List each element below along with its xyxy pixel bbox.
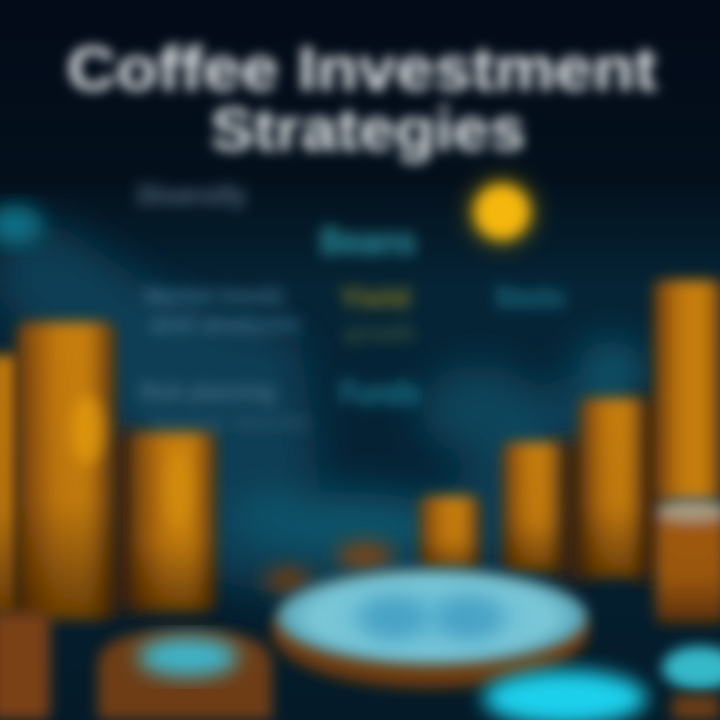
coin stack: mid left — [130, 432, 216, 612]
text block: upper left: Diversify — [138, 180, 247, 210]
title: Coffee Investment — [67, 35, 657, 104]
text block: middle left: Market trends — [145, 283, 285, 310]
label: teal center: Beans — [320, 221, 416, 263]
coin stack: far left — [0, 355, 20, 615]
text block: middle left — [145, 283, 300, 338]
text block: lower left: Risk planning — [140, 379, 275, 406]
label: teal lower center: Funds — [340, 374, 420, 412]
label: amber center — [340, 282, 415, 345]
coin stack: front right — [656, 499, 720, 623]
teal accent left — [0, 205, 43, 245]
label: teal right: Stocks — [495, 281, 565, 314]
label: amber center: growth — [345, 323, 415, 345]
bright cyan disc: bottom — [483, 670, 647, 720]
coin stack: tall left — [17, 322, 115, 620]
coin with teal top: bottom center-left — [98, 630, 272, 720]
text block: lower left — [140, 379, 310, 435]
background glow haze — [0, 225, 650, 600]
title — [67, 35, 657, 163]
coin stack: right 1 — [503, 442, 563, 572]
coin stack: right 2 — [580, 398, 646, 578]
coin base: bottom left — [0, 612, 50, 720]
yellow sun icon — [464, 174, 540, 250]
coin stack: small center — [420, 496, 480, 570]
text block: middle left: and analysis — [150, 311, 300, 338]
coin stack shadows, right — [110, 400, 665, 610]
large glowing disc — [272, 569, 588, 688]
cyan disc: bottom right — [662, 646, 720, 720]
text block: lower left: long term — [150, 410, 310, 435]
title: Strategies — [210, 96, 526, 163]
small coins behind disc — [264, 542, 393, 592]
label: amber center: Yield — [340, 282, 410, 313]
coin stack: tall right — [654, 280, 720, 500]
